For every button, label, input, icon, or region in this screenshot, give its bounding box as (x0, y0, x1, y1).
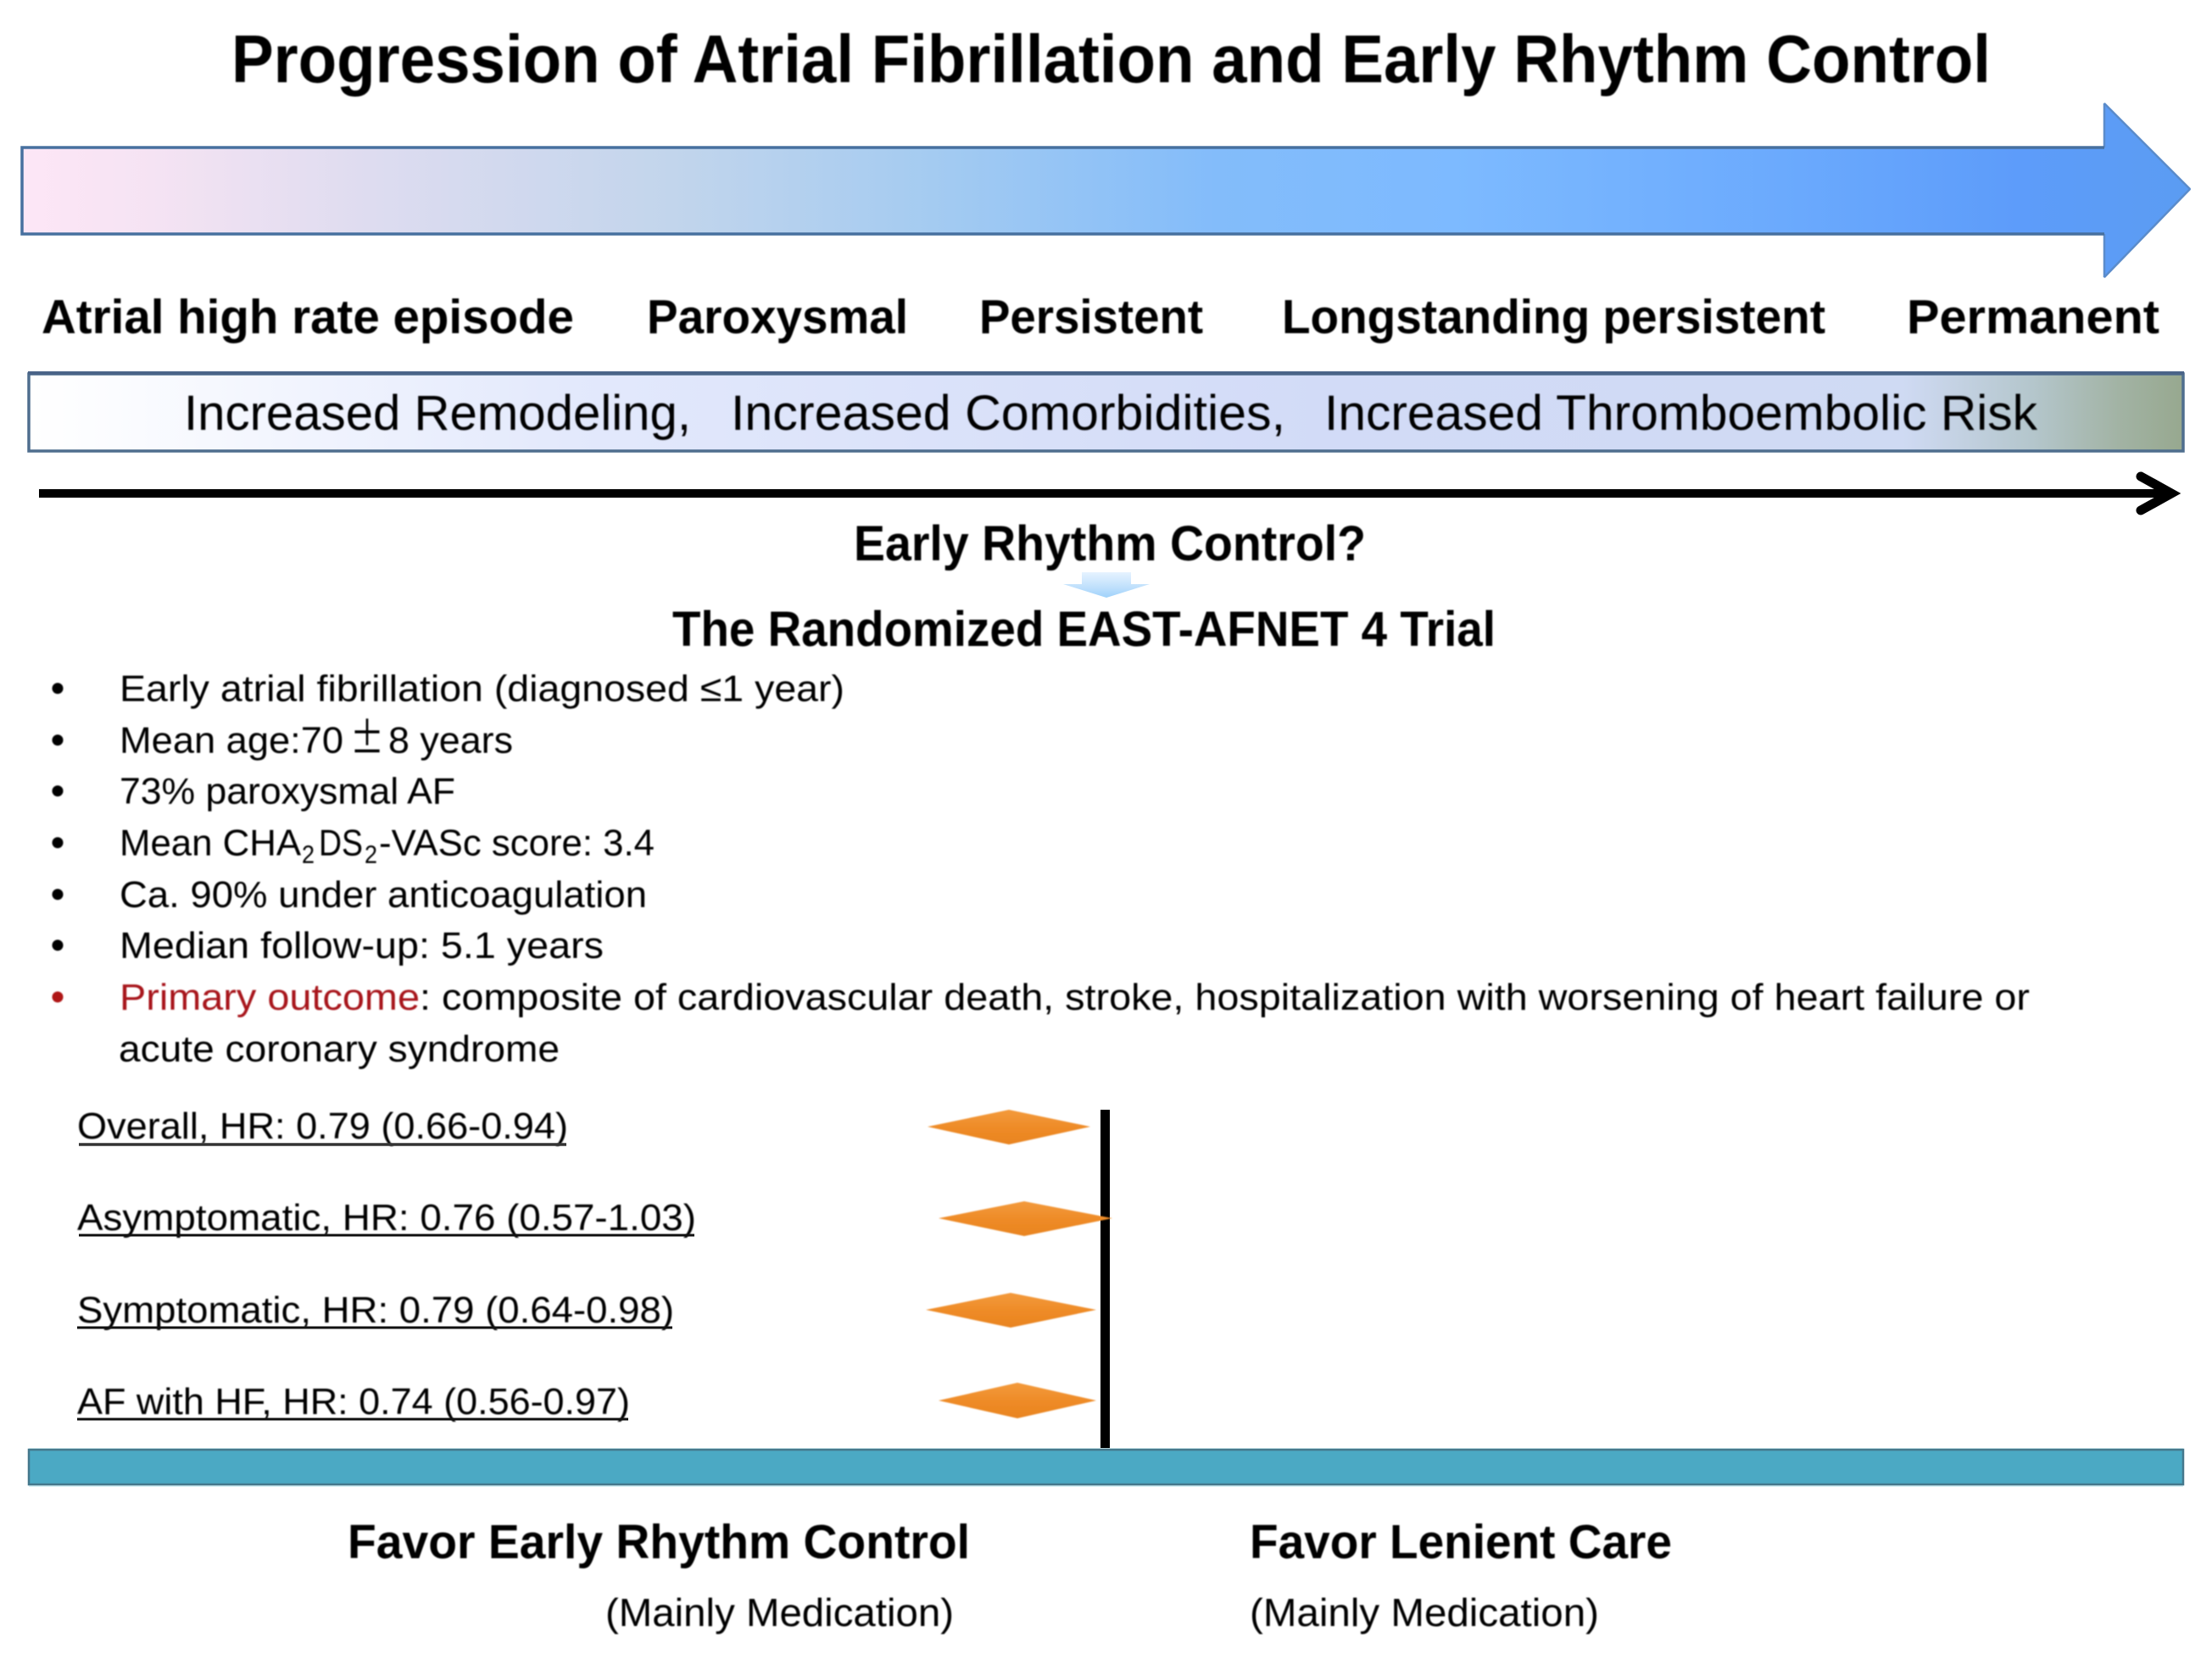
bullet: mean age: ± (350, 704, 384, 766)
bullet: paroxysmal share: 73% paroxysmal AF (120, 771, 455, 812)
bullet: CHA2DS2-VASc: -VASc score: 3.4 (379, 822, 655, 864)
forest row: AF with HF: AF with HF, HR: 0.74 (0.56-0.97) (77, 1381, 630, 1423)
risk: thromboembolic: Increased Thromboembolic Risk (1324, 386, 2038, 441)
label: favor lenient care: (Mainly Medication) (1250, 1590, 1599, 1635)
bullet: early AF: Early atrial fibrillation (diagnosed ≤1 year) (120, 668, 844, 710)
stage: persistent: Persistent (979, 290, 1203, 344)
label: favor early rhythm control: (Mainly Medication) (605, 1590, 954, 1635)
icon: down arrow (1063, 572, 1150, 598)
bullet: follow-up: Median follow-up: 5.1 years (120, 925, 604, 966)
bullet: primary outcome: Primary outcome (120, 977, 420, 1018)
bullet: CHA2DS2-VASc: Mean CHA (120, 822, 302, 864)
bar: teal axis (29, 1448, 2183, 1487)
bullet: primary outcome: acute coronary syndrome (119, 1028, 560, 1070)
bullet: primary outcome (53, 977, 2030, 1070)
arrow: black timeline (39, 476, 2172, 510)
forest row: AF with HF (77, 1381, 1096, 1423)
stage: longstanding persistent: Longstanding persistent (1282, 290, 1825, 344)
forest row: asymptomatic (77, 1197, 1112, 1239)
label: favor early rhythm control (348, 1515, 970, 1635)
bullet: CHA2DS2-VASc: DS (319, 822, 363, 864)
forest row: symptomatic (77, 1289, 1096, 1331)
bullet: mean age: 8 years (388, 720, 513, 761)
chart: forest plot (77, 1105, 1112, 1449)
bullet: mean age (53, 704, 513, 766)
bullet: CHA2DS2-VASc: 2 (365, 841, 377, 869)
risk: remodeling: Increased Remodeling, (184, 386, 691, 441)
reference line (1100, 1110, 1110, 1449)
bullet: mean age: Mean age:70 (120, 720, 343, 761)
label: favor early rhythm control: Favor Early Rhythm Control (348, 1515, 970, 1569)
risk: comorbidities: Increased Comorbidities, (731, 386, 1285, 441)
stage: permanent: Permanent (1907, 290, 2159, 344)
panel: increased risk bar (28, 373, 2184, 451)
bullet: CHA2DS2-VASc (53, 822, 655, 869)
label: favor lenient care (1250, 1515, 1672, 1635)
forest row: symptomatic: Symptomatic, HR: 0.79 (0.64-0.98) (77, 1289, 674, 1331)
arrow: AF progression gradient (22, 103, 2190, 277)
stage labels (42, 290, 2159, 344)
title: Progression of Atrial Fibrillation and Early Rhythm Control (231, 21, 1991, 97)
label: favor lenient care: Favor Lenient Care (1250, 1515, 1672, 1569)
heading: trial name: The Randomized EAST-AFNET 4 Trial (672, 602, 1496, 657)
bullet: CHA2DS2-VASc: 2 (302, 841, 315, 869)
bullet: primary outcome: : composite of cardiovascular death, stroke, hospitalization with worsening of heart failure or (420, 977, 2030, 1018)
forest row: overall: Overall, HR: 0.79 (0.66-0.94) (77, 1105, 568, 1147)
forest row: asymptomatic: Asymptomatic, HR: 0.76 (0.57-1.03) (77, 1197, 696, 1239)
bullet: anticoagulation: Ca. 90% under anticoagulation (120, 874, 647, 916)
heading: early rhythm control question: Early Rhythm Control? (854, 516, 1366, 571)
forest row: overall (77, 1105, 1090, 1147)
stage: paroxysmal: Paroxysmal (647, 290, 908, 344)
stage: atrial high rate episode: Atrial high rate episode (42, 290, 574, 344)
panel: trial details list (53, 668, 2030, 1070)
